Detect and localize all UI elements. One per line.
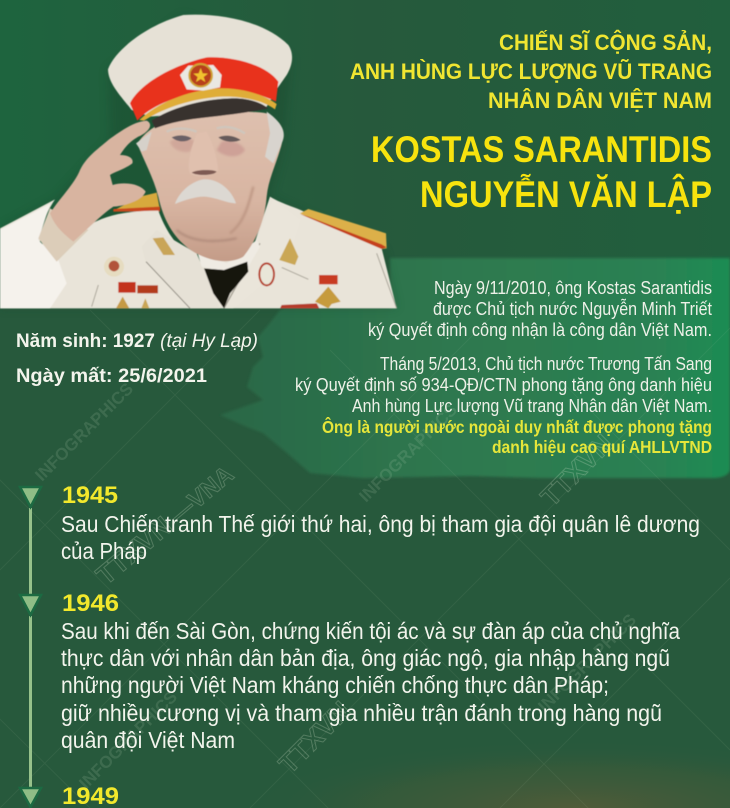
hand: [50, 121, 150, 242]
nose: [189, 132, 218, 176]
top background area: [0, 0, 730, 258]
cap gold cord: [139, 88, 277, 121]
timeline axis: [20, 487, 41, 807]
collar insignia: [153, 237, 175, 255]
tie: [204, 262, 248, 308]
cap band: [130, 57, 278, 121]
portrait photo: saluting officer: [0, 15, 397, 308]
watermarks: [31, 379, 640, 793]
birth and death dates: [16, 330, 258, 387]
cap crown: [108, 15, 292, 117]
timeline entry 1945: [61, 482, 700, 564]
cap badge: [180, 65, 222, 91]
timeline entry 1946: giữ nhiều cương vị và tham gia nhiều trận đánh trong hàng ngũ: [61, 700, 662, 726]
epaulette left: [113, 193, 160, 211]
moustache: [175, 179, 236, 204]
text block: citizenship: [368, 278, 712, 340]
face shading: [170, 138, 253, 241]
icon: timeline marker 1945: [20, 487, 41, 507]
callout: only foreigner: [322, 416, 712, 457]
timeline entry 1945: 1945: [62, 482, 118, 509]
face: [137, 112, 282, 261]
title: name: [371, 129, 712, 215]
watermarks: TTXVN: [91, 511, 178, 591]
watermarks: INFOGRAPHICS: [534, 610, 640, 716]
panel: green biography band: [220, 258, 730, 478]
watermarks: —VNA: [165, 461, 239, 530]
title: honorifics: NHÂN DÂN VIỆT NAM: [488, 88, 712, 113]
watermarks: TTXVN: [535, 428, 619, 512]
cuff: [38, 208, 88, 262]
timeline entry 1946: [61, 590, 680, 753]
watermarks: TTXVN: [273, 695, 357, 779]
watermarks: INFOGRAPHICS: [355, 400, 461, 506]
watermark pattern: [0, 288, 730, 808]
lapel shadows: [92, 253, 397, 308]
timeline entry 1946: quân đội Việt Nam: [61, 727, 235, 753]
birth and death dates: Năm sinh: 1927 (tại Hy Lạp): [16, 330, 258, 352]
watermarks: INFOGRAPHICS: [31, 379, 137, 485]
text block: hero title award: [295, 354, 712, 416]
timeline entry 1946: 1946: [62, 590, 119, 617]
watermarks: INFOGRAPHICS: [75, 687, 181, 793]
shirt collar: [197, 240, 260, 272]
title: honorifics: ANH HÙNG LỰC LƯỢNG VŨ TRANG: [350, 59, 712, 84]
hair: [265, 112, 284, 163]
icon: timeline marker 1946: [20, 595, 41, 615]
medals: [104, 257, 124, 277]
cap visor: [152, 98, 268, 128]
eyes: [172, 135, 192, 141]
bottom olive glow: [250, 710, 730, 808]
timeline entry 1946: thực dân với nhân dân bản địa, ông giác ngộ, gia nhập hàng ngũ: [61, 645, 670, 671]
birth and death dates: Ngày mất: 25/6/2021: [16, 365, 207, 387]
timeline entry 1946: những người Việt Nam kháng chiến chống thực dân Pháp;: [61, 672, 609, 698]
uniform: [0, 197, 397, 308]
icon: timeline marker 1949: [20, 788, 41, 807]
timeline entry 1945: của Pháp: [61, 538, 147, 564]
eyebrows: [167, 127, 245, 133]
right epaulette: [300, 209, 387, 249]
title: honorifics: CHIẾN SĨ CỘNG SẢN,: [499, 30, 712, 55]
title: honorifics: [350, 30, 712, 113]
